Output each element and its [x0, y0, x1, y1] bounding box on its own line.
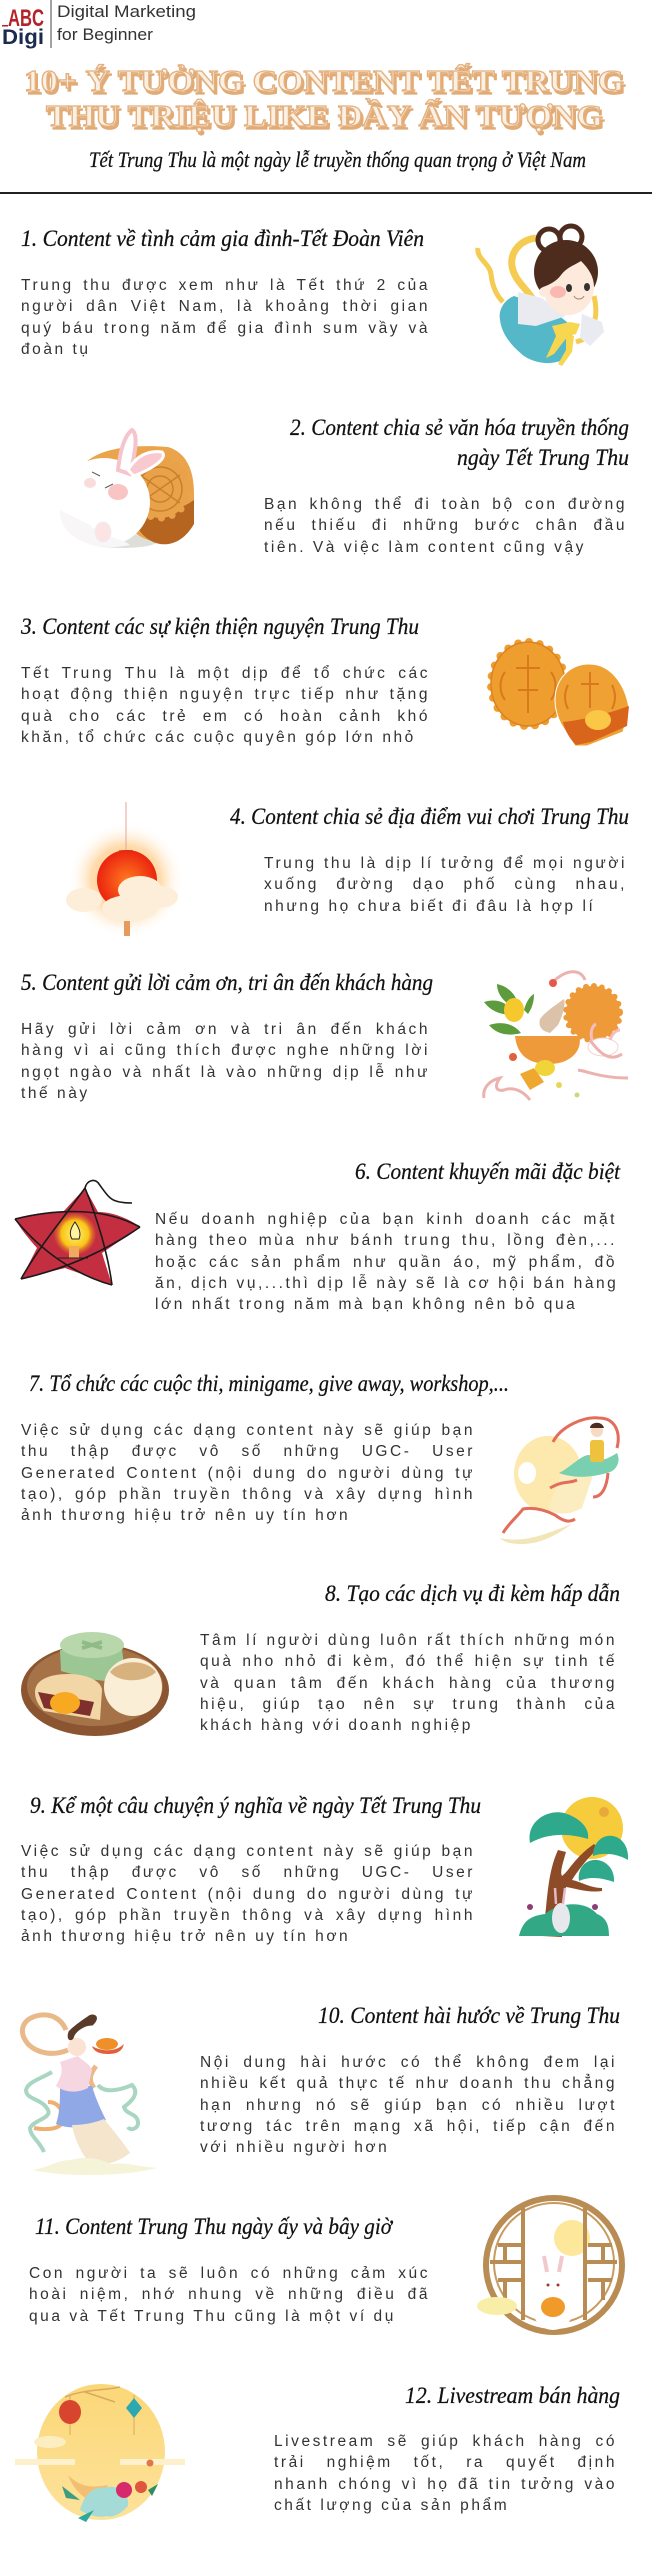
icon: red lantern with cloud [66, 802, 184, 938]
text block 12 [274, 2433, 617, 2514]
text block 7: tạo), góp phần truyền thông và xây dựng hình [21, 1486, 475, 1503]
text block 8: Tâm lí người dùng luôn rất thích những món [200, 1632, 617, 1649]
text block 6: hoặc các sản phẩm như quần áo, mỹ phẩm, đồ [155, 1254, 617, 1271]
text block 1: người dân Việt Nam, là khoảng thời gian [21, 298, 430, 315]
text block 4 [264, 855, 627, 915]
text block 10: Nội dung hài hước có thể không đem lại [200, 2054, 617, 2071]
text block 6 [155, 1211, 618, 1313]
text block 8: và quan tâm đến khách hàng của thương [200, 1675, 617, 1692]
text block 3 [21, 665, 430, 746]
title [24, 62, 624, 133]
text block 1: đoàn tụ [21, 341, 91, 358]
heading 5: 5. Content gửi lời cảm ơn, tri ân đến khách hàng [21, 970, 433, 995]
text block 5: hàng vì ai cũng thích được nghe những lời [21, 1042, 430, 1059]
text block 7: Việc sử dụng các dạng content này sẽ giúp bạn [21, 1422, 475, 1439]
text block 9 [21, 1843, 475, 1945]
text block 2 [264, 496, 627, 556]
text block 8: quà nho nhỏ đi kèm, đó thể hiện sự tinh tế [200, 1653, 617, 1670]
text block 6: lớn nhất trong năm mà bạn không nên bỏ qua [155, 1296, 577, 1313]
text block 9: Generated Content (nội dung do người dùng tự [21, 1886, 475, 1903]
heading 12: 12. Livestream bán hàng [405, 2383, 620, 2408]
logo: for Beginner [57, 25, 153, 44]
title: 10+ Ý TƯỞNG CONTENT TẾT TRUNG [24, 62, 624, 98]
text block 11: hoài niệm, nhớ nhung về những điều đã [29, 2286, 430, 2303]
text block 2: nếu thiếu đi những bước chân đầu [264, 517, 627, 534]
text block 7: ảnh thương hiệu trở nên uy tín hơn [21, 1507, 350, 1524]
heading 2: ngày Tết Trung Thu [457, 445, 629, 470]
heading 7: 7. Tổ chức các cuộc thi, minigame, give away, workshop,... [29, 1371, 509, 1396]
heading 10: 10. Content hài hước về Trung Thu [318, 2003, 620, 2028]
icon: moon fairy girl [478, 226, 604, 366]
logo: Digital Marketing [57, 2, 196, 21]
heading 3: 3. Content các sự kiện thiện nguyện Trung Thu [20, 614, 419, 639]
text block 6: ăn, dịch vụ,...thì dịp lễ này sẽ là cơ hội bán hàng [155, 1275, 618, 1292]
icon: lady flying with moon and ribbons [500, 1418, 619, 1544]
icon: mooncakes with flowers and rabbits [484, 972, 628, 1100]
text block 10: tương tác trên mạng xã hội, tiếp cận đến [200, 2118, 617, 2135]
text block 7 [21, 1422, 475, 1524]
text block 9: thu thập được vô số những UGC- User [21, 1864, 475, 1881]
icon: star lantern with candle [15, 1181, 140, 1285]
heading 11: 11. Content Trung Thu ngày ấy và bây giờ [35, 2214, 394, 2239]
text block 6: hàng theo mùa như bánh trung thu, lồng đèn,... [155, 1232, 617, 1249]
heading 1: 1. Content về tình cảm gia đình-Tết Đoàn Viên [21, 226, 424, 251]
text block 12: chất lượng của sản phẩm [274, 2497, 509, 2514]
text block 5 [21, 1021, 430, 1102]
icon: moon and pine tree [519, 1797, 628, 1937]
icon: round window with rabbit and moon [477, 2198, 622, 2332]
subtitle: Tết Trung Thu là một ngày lễ truyền thống quan trọng ở Việt Nam [89, 147, 586, 172]
text block 10: nhiều kết quả thực tế như doanh thu chẳng [200, 2075, 617, 2092]
text block 2: tiên. Và việc làm content cũng vậy [264, 539, 586, 556]
text block 12: Livestream sẽ giúp khách hàng có [274, 2433, 617, 2450]
text block 7: Generated Content (nội dung do người dùng tự [21, 1465, 475, 1482]
text block 8: khách hàng với doanh nghiệp [200, 1717, 473, 1734]
text block 5: ngọt ngào và nhất là vào những dịp lễ như [21, 1064, 430, 1081]
text block 1: quý báu trong năm để gia đình sum vầy và [21, 320, 430, 337]
text block 4: nhưng họ chưa biết đi đâu là hợp lí [264, 898, 595, 915]
text block 9: tạo), góp phần truyền thông và xây dựng hình [21, 1907, 475, 1924]
text block 1: Trung thu được xem như là Tết thứ 2 của [21, 277, 430, 294]
text block 5: Hãy gửi lời cảm ơn và tri ân đến khách [21, 1021, 430, 1038]
text block 3: hoạt động thiện nguyện trực tiếp như tặng [21, 686, 430, 703]
text block 3: khăn, tổ chức các cuộc quyên góp lớn nhỏ [21, 729, 416, 746]
icon: golden moon with lantern and flowers [15, 2384, 185, 2522]
text block 1 [21, 277, 430, 358]
text block 4: xuống đường dạo phố cùng nhau, [264, 876, 627, 893]
text block 9: ảnh thương hiệu trở nên uy tín hơn [21, 1928, 350, 1945]
logo: ABC [8, 5, 44, 32]
icon: fairy carrying mooncake [22, 2015, 157, 2175]
text block 3: Tết Trung Thu là một dịp để tổ chức các [21, 665, 430, 682]
logo [2, 0, 196, 49]
text block 6: Nếu doanh nghiệp của bạn kinh doanh các mặt [155, 1211, 617, 1228]
icon: plate of cakes [21, 1632, 169, 1736]
text block 11: qua và Tết Trung Thu cũng là một ví dụ [29, 2308, 396, 2325]
heading 6: 6. Content khuyến mãi đặc biệt [355, 1159, 621, 1184]
heading 2 [290, 415, 629, 470]
icon: two mooncakes [491, 642, 629, 746]
text block 12: nhanh chóng vì họ đã tin tưởng vào [274, 2476, 617, 2493]
heading 8: 8. Tạo các dịch vụ đi kèm hấp dẫn [325, 1581, 620, 1606]
text block 2: Bạn không thể đi toàn bộ con đường [264, 496, 627, 513]
text block 7: thu thập được vô số những UGC- User [21, 1443, 475, 1460]
text block 8 [200, 1632, 617, 1734]
text block 12: trải nghiệm tốt, ra quyết định [274, 2454, 617, 2471]
text block 11: Con người ta sẽ luôn có những cảm xúc [29, 2265, 430, 2282]
title: THU TRIỆU LIKE ĐẦY ẤN TƯỢNG [46, 97, 603, 133]
text block 10: với nhiều người hơn [200, 2139, 389, 2156]
text block 5: thế này [21, 1085, 90, 1102]
heading 2: 2. Content chia sẻ văn hóa truyền thống [290, 415, 629, 440]
text block 8: hiệu, giúp tạo nên sự trung thành của [200, 1696, 617, 1713]
text block 3: quà cho các trẻ em có hoàn cảnh khó [21, 708, 430, 725]
text block 10 [200, 2054, 617, 2156]
heading 9: 9. Kể một câu chuyện ý nghĩa về ngày Tết Trung Thu [30, 1793, 481, 1818]
text block 10: hạn nhưng nó sẽ giúp bạn có nhiều lượt [200, 2097, 617, 2114]
text block 9: Việc sử dụng các dạng content này sẽ giúp bạn [21, 1843, 475, 1860]
text block 4: Trung thu là dịp lí tưởng để mọi người [264, 855, 627, 872]
logo: Digi [2, 26, 44, 49]
icon: rabbit and mooncake [58, 430, 194, 548]
heading 4: 4. Content chia sẻ địa điểm vui chơi Trung Thu [230, 804, 629, 829]
text block 11 [29, 2265, 430, 2325]
